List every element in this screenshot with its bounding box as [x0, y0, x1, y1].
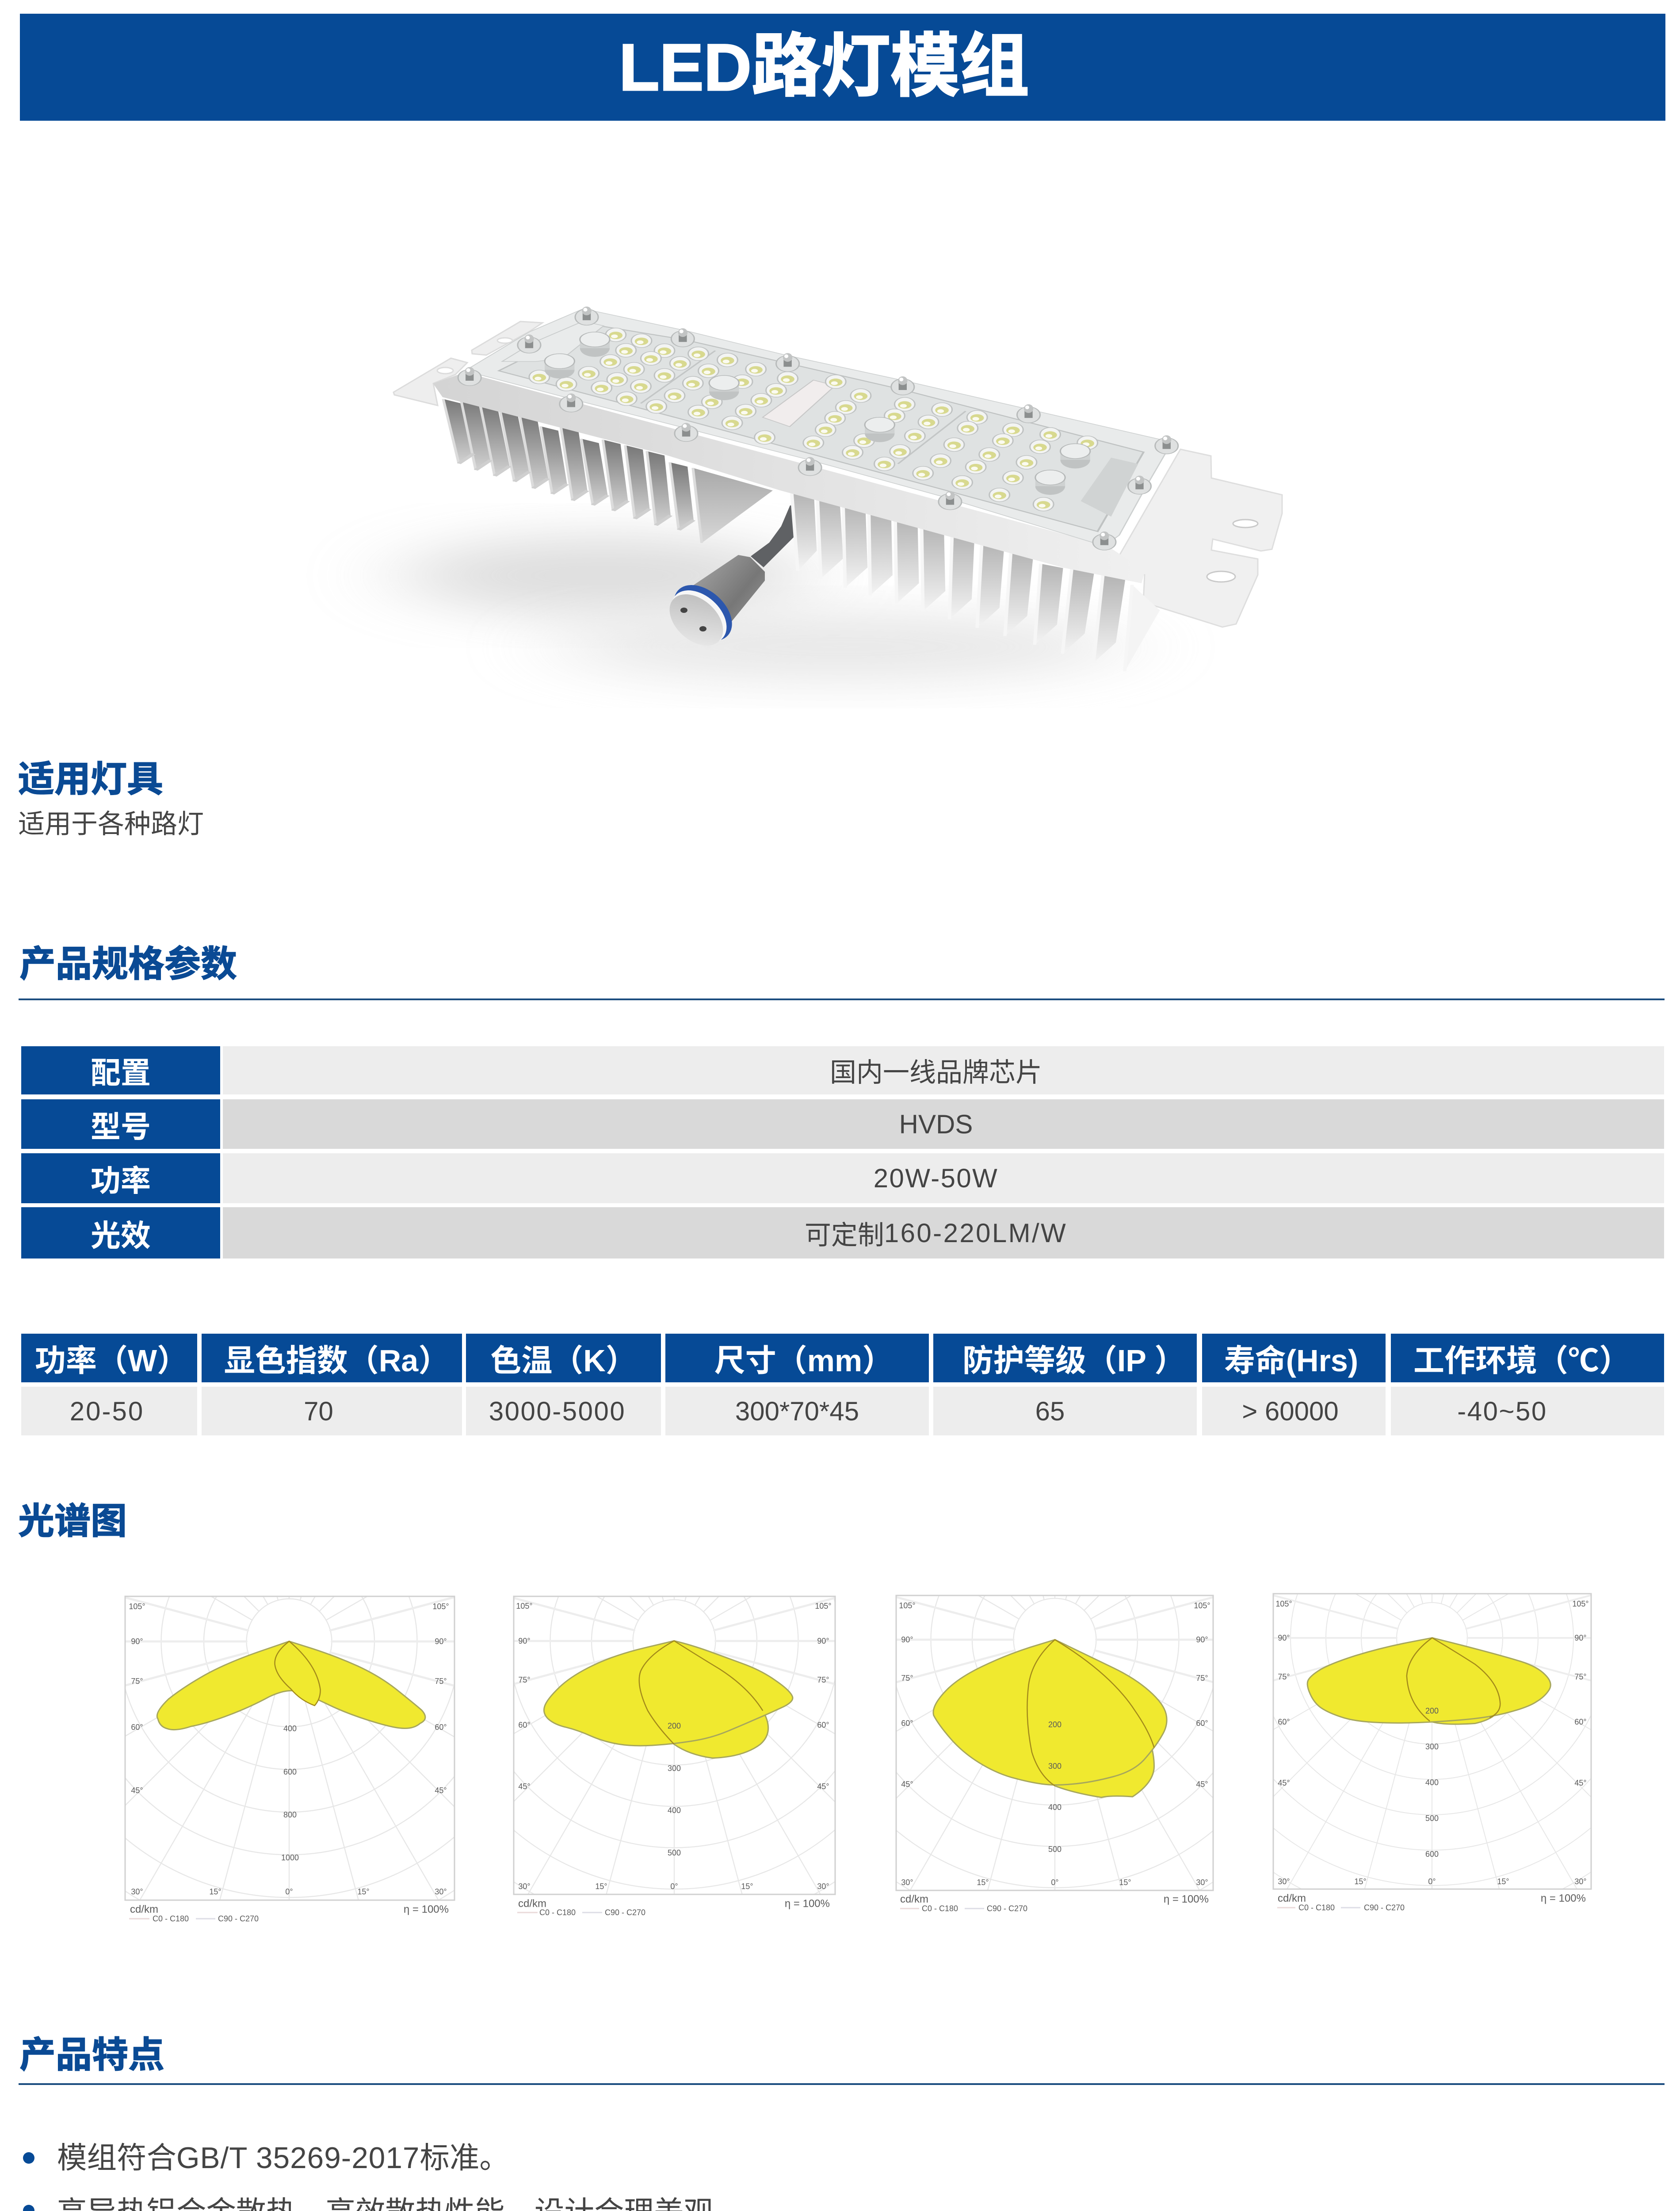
chart 2 labels: 500: [668, 1848, 681, 1857]
chart 1 labels: 60°: [435, 1723, 447, 1732]
row: luminous efficacy: 160-220LM/W: [884, 1218, 1067, 1248]
chart 2 labels: 15°: [595, 1882, 607, 1891]
chart 4 labels: 75°: [1574, 1672, 1587, 1681]
chart 1 legend: cd/km: [130, 1903, 158, 1916]
header row: 工作环境（℃）: [1413, 1343, 1630, 1378]
data row: > 60000: [1242, 1396, 1339, 1426]
chart 1 labels: 800: [283, 1810, 297, 1819]
row: power: 20W-50W: [874, 1163, 998, 1193]
spec table: configuration rows: [21, 1046, 1664, 1259]
header row: 寿命(Hrs): [1224, 1343, 1358, 1378]
chart 4 curves: [1307, 1638, 1550, 1724]
light distribution chart 2: [513, 1595, 836, 1915]
chart 3 labels: 300: [1048, 1762, 1061, 1771]
optical lens plate: [465, 309, 1172, 546]
chart 1 labels: 45°: [131, 1786, 143, 1795]
heading: applicable luminaires: 适用灯具: [18, 759, 163, 799]
light distribution chart 1: [125, 1595, 455, 1921]
soft floor shadow: [401, 535, 1125, 681]
aluminium base rail: [433, 372, 1145, 583]
row: luminous efficacy: [21, 1207, 1664, 1259]
chart 4 labels: 45°: [1574, 1779, 1587, 1787]
chart 4 labels: 105°: [1572, 1599, 1589, 1608]
chart 2 labels: 30°: [518, 1882, 531, 1891]
chart 3 labels: 200: [1048, 1720, 1061, 1729]
chart 2 curves: [544, 1641, 793, 1758]
chart 1 legend: C0 - C180: [153, 1914, 189, 1923]
chart 3 labels: 90°: [901, 1635, 913, 1644]
header row: [21, 1334, 1664, 1382]
chart 4 labels: 200: [1425, 1706, 1439, 1715]
chart 1 labels: 75°: [131, 1677, 143, 1686]
chart 4 labels: 90°: [1278, 1633, 1290, 1642]
data row: [21, 1387, 1664, 1435]
chart 1 legend: [129, 1903, 449, 1923]
chart 3 labels: 90°: [1196, 1635, 1208, 1644]
light distribution chart 4: [1272, 1593, 1592, 1910]
heading: product features: 产品特点: [19, 2035, 164, 2075]
row: power: [21, 1153, 1664, 1203]
chart 4 legend: η = 100%: [1541, 1893, 1586, 1904]
title text: LED路灯模组: [619, 28, 1029, 105]
right heat sink fins: [792, 492, 1160, 671]
LED chips: [529, 328, 1098, 511]
chart 4 labels: 500: [1425, 1814, 1439, 1823]
data row: 300*70*45: [735, 1396, 859, 1426]
chart 2 legend: [517, 1898, 830, 1917]
row: model: HVDS: [899, 1109, 973, 1139]
chart 3 labels: 30°: [901, 1878, 913, 1887]
chart 4 labels: 60°: [1574, 1718, 1587, 1726]
row: luminous efficacy: 光效: [91, 1219, 151, 1252]
chart 4 legend: [1277, 1893, 1586, 1912]
spec table: parameters: [21, 1334, 1664, 1435]
chart 4 labels: 400: [1425, 1778, 1439, 1787]
chart 1 labels: 60°: [131, 1723, 143, 1732]
header row: 功率（W）: [35, 1343, 188, 1378]
data row: 65: [1035, 1396, 1065, 1426]
chart 2 legend: C0 - C180: [539, 1908, 576, 1917]
chart 4 labels: 300: [1425, 1742, 1439, 1751]
chart 2 labels: 90°: [518, 1637, 531, 1645]
chart 1 legend: η = 100%: [404, 1903, 449, 1916]
chart 4 labels: 0°: [1428, 1877, 1436, 1886]
chart 3 labels: 15°: [1119, 1878, 1131, 1887]
chart 3 labels: 400: [1048, 1803, 1061, 1812]
chart 1 labels: 105°: [432, 1602, 449, 1611]
chart 4 labels: 60°: [1278, 1718, 1290, 1726]
chart 3 labels: 45°: [901, 1780, 913, 1789]
chart 1 labels: 105°: [129, 1602, 145, 1611]
left heat sink fins: [443, 399, 773, 543]
row: configuration: 国内一线品牌芯片: [830, 1058, 1042, 1087]
chart 2 legend: C90 - C270: [605, 1908, 645, 1917]
chart 3 legend: [900, 1894, 1209, 1913]
row: power: 功率: [91, 1164, 151, 1198]
chart 3 legend: C0 - C180: [922, 1904, 958, 1913]
row: model: 型号: [91, 1110, 151, 1144]
chart 3 legend: cd/km: [900, 1894, 928, 1905]
chart 2 labels: 90°: [817, 1637, 829, 1645]
chart 3 labels: 75°: [1196, 1674, 1208, 1683]
chart 2 labels: 300: [668, 1764, 681, 1773]
chart 2 labels: 60°: [518, 1721, 531, 1729]
chart 4 legend: C90 - C270: [1364, 1903, 1405, 1912]
data row: 20-50: [70, 1396, 144, 1426]
row: luminous efficacy: 可定制: [805, 1220, 884, 1250]
chart 2 labels: 400: [668, 1806, 681, 1815]
chart 3 labels: 60°: [901, 1719, 913, 1728]
chart 2 labels: 105°: [516, 1602, 533, 1610]
title banner: [20, 14, 1665, 121]
chart 1 labels: 75°: [435, 1677, 447, 1686]
chart 3 labels: 500: [1048, 1845, 1061, 1854]
chart 2 labels: 30°: [817, 1882, 829, 1891]
chart 3 labels: 105°: [899, 1601, 916, 1610]
chart 2 labels: 105°: [815, 1602, 832, 1610]
chart 2 labels: [516, 1602, 832, 1891]
header row: 防护等级（IP ）: [962, 1343, 1185, 1378]
chart 1 labels: 0°: [285, 1887, 293, 1896]
chart 2 labels: 45°: [817, 1782, 829, 1791]
chart 3 labels: [899, 1601, 1210, 1887]
cable and connector: [660, 505, 794, 656]
header row: 尺寸（mm）: [714, 1343, 893, 1378]
chart 3 legend: η = 100%: [1164, 1894, 1209, 1905]
chart 3 labels: 15°: [977, 1878, 989, 1887]
chart 2 labels: 15°: [741, 1882, 753, 1891]
chart 3 labels: 75°: [901, 1674, 913, 1683]
chart 1 labels: 15°: [357, 1887, 370, 1896]
chart 4 labels: 30°: [1278, 1877, 1290, 1886]
feature 1: 模组符合GB/T 35269-2017标准。: [57, 2142, 509, 2175]
left mounting tabs: [393, 321, 542, 405]
product photo: LED street light module: [393, 306, 1282, 681]
data row: 70: [304, 1396, 333, 1426]
chart 4 labels: 45°: [1278, 1779, 1290, 1787]
screws: [458, 306, 1178, 550]
chart 2 legend: η = 100%: [785, 1898, 830, 1909]
text: applicable luminaires description: 适用于各种路灯: [18, 809, 204, 839]
chart 2 labels: 45°: [518, 1782, 531, 1791]
chart 4 labels: 30°: [1574, 1877, 1587, 1886]
chart 3 labels: 60°: [1196, 1719, 1208, 1728]
heading: product specifications: 产品规格参数: [19, 944, 237, 984]
chart 4 labels: 600: [1425, 1850, 1439, 1859]
chart 3 labels: 45°: [1196, 1780, 1208, 1789]
data row: 3000-5000: [489, 1396, 626, 1426]
chart 4 labels: 15°: [1497, 1877, 1509, 1886]
chart 4 labels: 90°: [1574, 1633, 1587, 1642]
chart 2 labels: 200: [668, 1721, 681, 1730]
chart 4 legend: cd/km: [1278, 1893, 1306, 1904]
chart 4 labels: 75°: [1278, 1672, 1290, 1681]
chart 1 curves: [157, 1641, 425, 1730]
feature list: [19, 2138, 770, 2211]
chart 1 legend: C90 - C270: [218, 1914, 259, 1923]
chart 1 labels: 600: [283, 1767, 297, 1776]
header row: 显色指数（Ra）: [224, 1343, 449, 1378]
chart 4 legend: C0 - C180: [1298, 1903, 1335, 1912]
chart 3 legend: C90 - C270: [987, 1904, 1027, 1913]
chart 4 labels: 15°: [1354, 1877, 1367, 1886]
chart 4 labels: [1275, 1599, 1589, 1886]
chart 1 labels: 45°: [435, 1786, 447, 1795]
chart 1 labels: 30°: [131, 1887, 143, 1896]
chart 2 labels: 75°: [518, 1675, 531, 1684]
right mounting plate and tabs: [1115, 449, 1282, 627]
chart 3 labels: 0°: [1051, 1878, 1059, 1887]
chart 1 labels: 90°: [131, 1637, 143, 1646]
row: configuration: 配置: [91, 1056, 151, 1090]
chart 2 labels: 0°: [670, 1882, 678, 1891]
chart 1 labels: 15°: [209, 1887, 221, 1896]
optic posts: [545, 332, 1090, 495]
chart 3 labels: 105°: [1194, 1601, 1210, 1610]
row: configuration: [21, 1046, 1664, 1094]
header row: 色温（K）: [490, 1343, 637, 1378]
heading: light distribution: 光谱图: [18, 1501, 127, 1542]
chart 2 legend: cd/km: [518, 1898, 546, 1909]
chart 3 curves: [933, 1640, 1167, 1798]
chart 3 labels: 30°: [1196, 1878, 1208, 1887]
chart 1 labels: 30°: [435, 1887, 447, 1896]
data row: -40~50: [1457, 1396, 1547, 1426]
row: model: [21, 1099, 1664, 1149]
chart 4 labels: 105°: [1275, 1599, 1292, 1608]
chart 2 labels: 60°: [817, 1721, 829, 1729]
chart 2 labels: 75°: [817, 1675, 829, 1684]
feature 1: [19, 2138, 593, 2178]
chart 1 labels: 1000: [281, 1853, 299, 1862]
chart 1 labels: 400: [283, 1724, 297, 1733]
light distribution chart 3: [896, 1595, 1214, 1911]
lens plate and base rail: [433, 306, 1178, 583]
chart 1 labels: 90°: [435, 1637, 447, 1646]
chart 1 labels: [129, 1602, 449, 1896]
